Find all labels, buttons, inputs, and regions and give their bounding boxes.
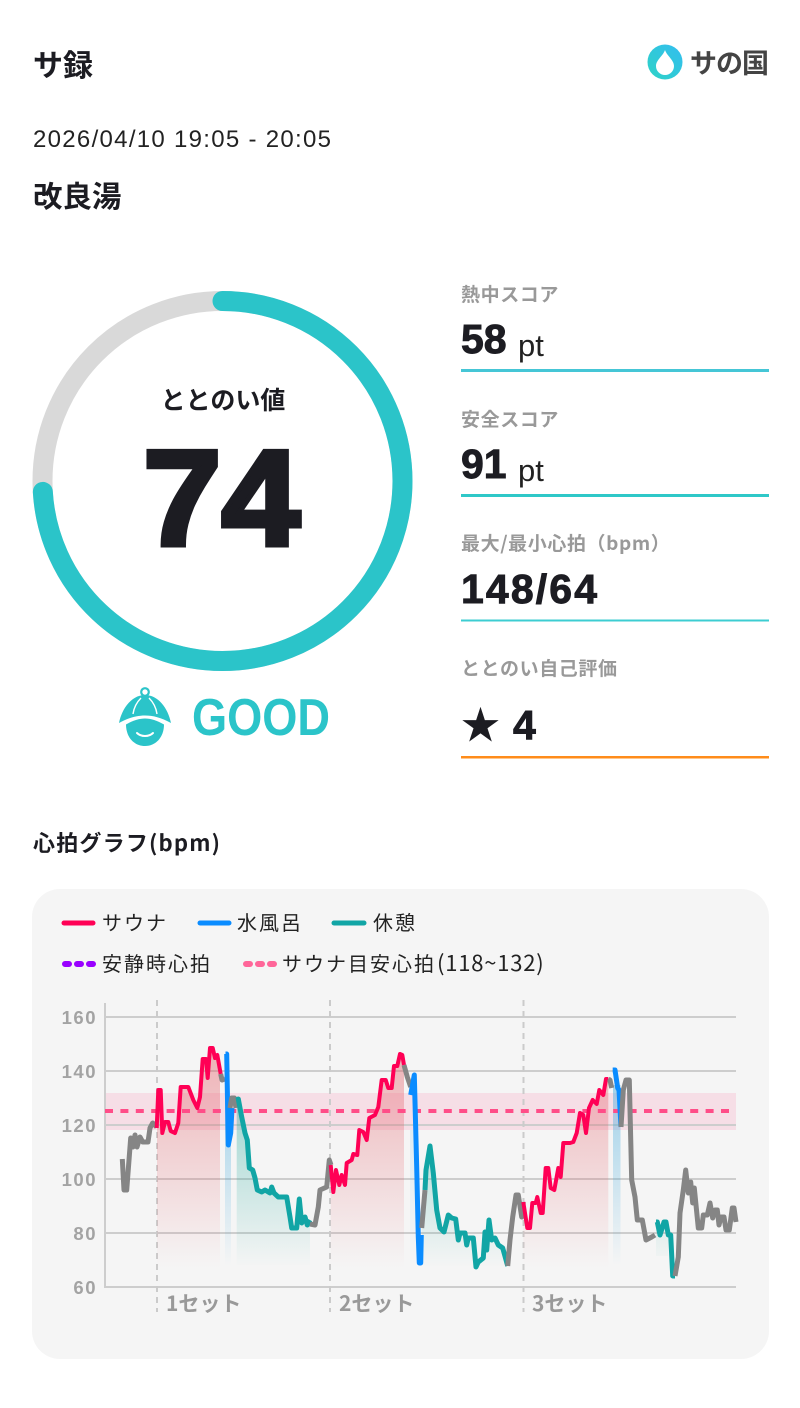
logo wordmark: サの国: [690, 42, 769, 81]
legend: 水風呂: [237, 907, 303, 936]
target heart rate band: [105, 1093, 736, 1130]
rating label: GOOD: [192, 689, 330, 747]
y axis labels: 80: [73, 1223, 97, 1244]
stat: heat score: 58: [461, 316, 507, 362]
logo: [648, 42, 769, 81]
y axis labels: 100: [62, 1169, 97, 1190]
set labels: 1セット: [166, 1288, 241, 1318]
stat: heat score: 熱中スコア: [461, 280, 559, 307]
y axis labels: [62, 1007, 97, 1298]
stat: heat score: pt: [518, 328, 544, 363]
shaded phase areas: [157, 1048, 668, 1270]
stat: self rating: ととのい自己評価: [461, 654, 618, 681]
set labels: [166, 1288, 607, 1318]
rating badge: [119, 688, 330, 747]
ring value: 74: [143, 422, 300, 574]
stat: self rating: [461, 654, 769, 758]
y axis labels: 120: [62, 1115, 97, 1136]
set labels: 3セット: [532, 1288, 607, 1318]
legend: 休憩: [373, 907, 417, 936]
y axis labels: 60: [73, 1277, 97, 1298]
heart rate line: [122, 1048, 736, 1276]
stat: max and min heart rate: 最大/最小心拍（bpm）: [461, 529, 670, 556]
session date and time: 2026/04/10 19:05 - 20:05: [33, 126, 331, 153]
y axis labels: 160: [62, 1007, 97, 1028]
legend: 安静時心拍: [102, 948, 212, 977]
stat: safety score: [461, 405, 769, 497]
facility name: 改良湯: [33, 174, 122, 216]
icon: bell hat mascot: [119, 688, 171, 746]
legend: (118~132): [437, 946, 545, 978]
panel: heart rate chart: [32, 889, 769, 1359]
set dividers: [157, 1000, 524, 1312]
stat: safety score: pt: [518, 453, 544, 488]
chart heading: 心拍グラフ(bpm): [33, 826, 220, 858]
stat: safety score: 91: [461, 441, 507, 487]
target heart rate dashed line: [105, 1109, 736, 1113]
legend: サウナ目安心拍: [282, 948, 436, 977]
stat: max and min heart rate: 148/64: [461, 566, 597, 612]
grid lines: [105, 1003, 736, 1288]
score ring: [42, 301, 402, 661]
stat: self rating: ★: [461, 695, 500, 751]
stat: heat score: [461, 280, 769, 372]
y axis labels: 140: [62, 1061, 97, 1082]
legend: サウナ: [102, 907, 168, 936]
icon: water drop: [648, 44, 682, 80]
stat: self rating: 4: [513, 702, 536, 748]
title: サ録: [33, 41, 93, 85]
stat: safety score: 安全スコア: [461, 405, 559, 432]
legend: [64, 907, 545, 978]
ring label: ととのい値: [161, 381, 285, 417]
set labels: 2セット: [339, 1288, 414, 1318]
stat: max and min heart rate: [461, 529, 769, 622]
